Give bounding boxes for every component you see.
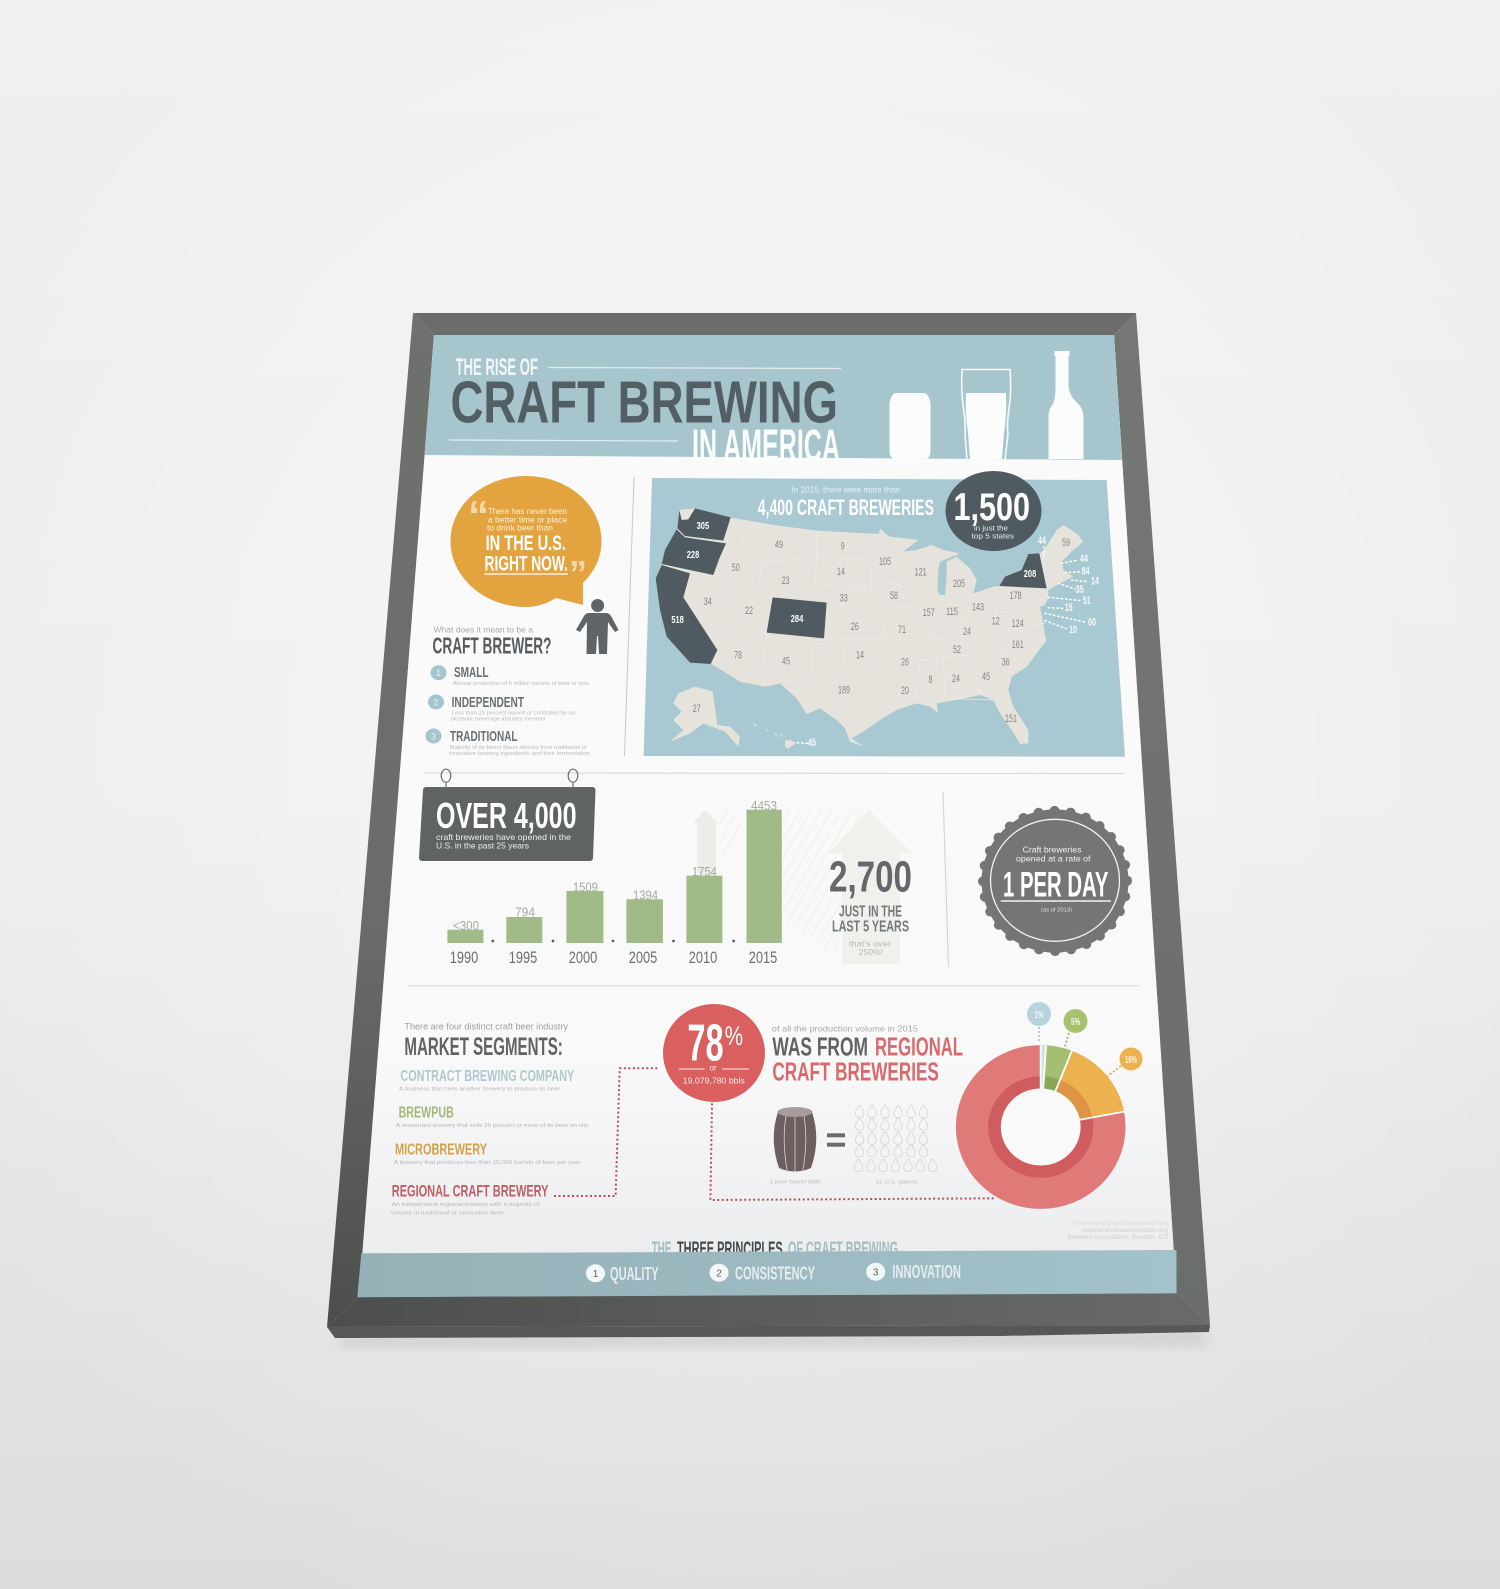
- year axis labels: 2015: [749, 948, 777, 967]
- heading: three principles: THE: [652, 1238, 671, 1260]
- year axis labels: 2010: [689, 948, 717, 967]
- callout: 1,500 in top 5 states: top 5 states: [972, 532, 1014, 541]
- hanging sign: over 4,000: U.S. in the past 25 years: [436, 841, 529, 851]
- callout: 78 percent: 78: [687, 1015, 724, 1073]
- map state numbers: 45: [982, 671, 990, 683]
- heading: market segments: MARKET SEGMENTS:: [404, 1033, 563, 1061]
- source credits: [1067, 1220, 1169, 1241]
- bar values: [453, 798, 777, 933]
- bar chart: breweries by year: [447, 798, 912, 967]
- map land and states: [656, 508, 1088, 749]
- principle 1: quality: QUALITY: [610, 1264, 659, 1284]
- map state numbers: 121: [915, 567, 927, 579]
- heading: was from regional craft breweries: WAS FROM: [772, 1032, 868, 1062]
- hawaii: [753, 723, 796, 749]
- alaska: [670, 687, 740, 747]
- map state numbers: 305: [697, 520, 709, 532]
- callout dotted leaders: [797, 547, 1088, 743]
- item: traditional: Majority of its beers flavor derives from traditional or: [450, 745, 587, 751]
- segment: contract brewing company: A business that hires another brewery to produce its beer: [399, 1087, 560, 1093]
- map heading: 4,400 CRAFT BREWERIES: [758, 495, 934, 520]
- hatched background: [718, 810, 868, 958]
- map state numbers: 24: [952, 673, 960, 685]
- segment: regional craft brewery: REGIONAL CRAFT BREWERY: [392, 1181, 549, 1200]
- item: independent: 2: [433, 697, 439, 707]
- icon: person: [576, 599, 618, 654]
- stat: 2,700 in last 5 years: 250%!: [859, 948, 883, 957]
- poster sheet: [359, 335, 1176, 1297]
- stat: 2,700 in last 5 years: [829, 853, 912, 957]
- heading: three principles: THREE PRINCIPLES: [677, 1238, 783, 1260]
- item: independent: alcoholic beverage industry member: [450, 716, 546, 722]
- bar values: 794: [515, 905, 535, 920]
- segment: brewpub: A restaurant-brewery that sells 25 percent or more of its beer on site: [396, 1123, 589, 1129]
- badge: 1 per day: Craft breweries: [1023, 844, 1082, 854]
- footer band: principles: [357, 1250, 1176, 1297]
- dark state: colorado: [767, 597, 827, 638]
- heading: was from regional craft breweries: REGIONAL: [875, 1032, 963, 1062]
- big growth arrow: [828, 810, 912, 964]
- map state numbers: 15: [1065, 602, 1073, 614]
- stat: 2,700 in last 5 years: LAST 5 YEARS: [832, 919, 909, 936]
- closing quote mark: ”: [569, 553, 587, 594]
- year axis labels: [450, 948, 777, 967]
- map state numbers: 20: [901, 685, 909, 697]
- quote text: a better time or place: [488, 516, 568, 524]
- callout: 78 percent: 19,079,780 bbls: [683, 1075, 745, 1085]
- map state numbers: 105: [879, 556, 891, 568]
- map state numbers: 14: [1091, 576, 1100, 588]
- map state numbers: 151: [1005, 713, 1017, 725]
- map state numbers: 36: [1002, 657, 1010, 669]
- bar values: 1394: [633, 888, 658, 903]
- principle 3: innovation: 3: [873, 1267, 879, 1278]
- map state numbers: 24: [963, 626, 971, 638]
- year axis labels: 1990: [450, 948, 478, 967]
- map state numbers: 71: [898, 624, 906, 636]
- map state numbers: 178: [1010, 590, 1022, 602]
- opening quote mark: “: [468, 492, 489, 539]
- hanging sign: over 4,000: OVER 4,000: [436, 795, 576, 836]
- bar values: 4453: [751, 798, 777, 813]
- panel: market segments: [391, 1021, 589, 1216]
- source credits: All data and graphics sourced from: [1072, 1220, 1168, 1227]
- map state numbers: 161: [1012, 639, 1024, 651]
- principle 3: innovation: INNOVATION: [892, 1262, 961, 1282]
- item: small: 1: [436, 668, 441, 678]
- map heading: In 2015, there were more than: [792, 486, 900, 495]
- map state numbers: 45: [782, 656, 790, 668]
- icon grid: 31 gallons: 31 U.S. gallons: [876, 1180, 918, 1186]
- badge: 1 per day: [982, 809, 1128, 953]
- title: the rise of: THE RISE OF: [456, 354, 538, 381]
- source credits: www.brewersassociation.org: [1081, 1227, 1169, 1234]
- bar values: 1509: [573, 879, 598, 894]
- stat: 2,700 in last 5 years: JUST IN THE: [839, 904, 902, 921]
- separator dots: [491, 940, 735, 942]
- year axis labels: 1995: [509, 948, 537, 967]
- segment: brewpub: BREWPUB: [399, 1105, 454, 1122]
- badge: 1 per day: (as of 2013): [1041, 908, 1072, 914]
- heading: craft brewer: CRAFT BREWER?: [432, 632, 552, 658]
- segment: contract brewing company: [399, 1068, 575, 1093]
- callout: 16 percent: 16%: [1125, 1055, 1137, 1066]
- map state numbers: 49: [775, 539, 783, 551]
- panel: craft brewer definition: What does it mean to be a: [434, 626, 534, 635]
- icon: beer barrel: 1 beer barrel (bbl): [770, 1180, 821, 1186]
- icon: can: [890, 393, 930, 458]
- map state numbers: 59: [1062, 537, 1070, 549]
- picture frame: [327, 313, 1210, 1338]
- map state numbers: 10: [1069, 624, 1077, 636]
- map state numbers: 143: [972, 602, 984, 614]
- year axis labels: 2005: [629, 948, 657, 967]
- item: small: Annual production of 6 million barrels of beer or less: [453, 681, 590, 687]
- map state numbers: 228: [687, 549, 699, 561]
- segment: regional craft brewery: An independent regional brewery with a majority of: [392, 1202, 540, 1208]
- principle 2: consistency: [710, 1264, 815, 1284]
- map state numbers: 27: [693, 703, 701, 715]
- item: independent: INDEPENDENT: [452, 694, 524, 711]
- map state numbers: 84: [1082, 566, 1090, 578]
- sign hooks: [441, 769, 578, 788]
- item: traditional: 3: [431, 731, 436, 741]
- map state numbers: 52: [953, 644, 961, 656]
- heading: was from regional craft breweries: of all the production volume in 2015: [772, 1023, 918, 1033]
- segment: microbrewery: A brewery that produces less than 15,000 barrels of beer per year: [394, 1160, 581, 1166]
- map state numbers: 44: [1038, 535, 1047, 547]
- map state numbers: 518: [671, 614, 684, 626]
- panel: market segments: There are four distinct craft beer industry: [404, 1021, 568, 1031]
- stat: 2,700 in last 5 years: 2,700: [829, 853, 912, 902]
- speech bubble quote: [450, 476, 602, 607]
- map state numbers: 35: [1076, 584, 1084, 596]
- principle 1: quality: 1: [593, 1269, 599, 1280]
- map state numbers: 157: [923, 607, 935, 619]
- map state numbers: 14: [837, 566, 845, 578]
- heading: three principles: OF CRAFT BREWING: [788, 1238, 898, 1260]
- callout: 5 percent: 5%: [1071, 1017, 1080, 1028]
- map state numbers: 44: [1080, 553, 1089, 565]
- map state numbers: 45: [808, 737, 816, 749]
- callout: 16 percent: [1108, 1048, 1142, 1076]
- hanging sign: over 4,000: [422, 769, 592, 858]
- principle 3: innovation: [866, 1262, 961, 1282]
- source credits: Brewers Association, Boulder, CO: [1067, 1234, 1168, 1241]
- segment: brewpub: [396, 1105, 589, 1129]
- map state numbers: 78: [734, 650, 742, 662]
- map state numbers: 205: [953, 578, 965, 590]
- map state numbers: 208: [1024, 568, 1036, 580]
- year axis labels: 2000: [569, 948, 597, 967]
- item: traditional: [426, 728, 590, 757]
- map state numbers: 58: [890, 590, 898, 602]
- icon grid: 31 gallons: [854, 1106, 937, 1186]
- callout: 1 percent: [1027, 1002, 1051, 1043]
- map state numbers: 284: [791, 613, 803, 625]
- map state numbers: 33: [840, 593, 848, 605]
- callout: 1,500 in top 5 states: 1,500: [954, 486, 1030, 529]
- icon: beer barrel: [770, 1107, 821, 1186]
- segment: 5 percent: [1041, 1045, 1072, 1127]
- callout: 1 percent: 1%: [1034, 1010, 1044, 1021]
- icon: equals sign: [827, 1133, 845, 1147]
- segment: contract brewing company: CONTRACT BREWING COMPANY: [400, 1068, 575, 1085]
- map state numbers: 14: [856, 650, 864, 662]
- map state numbers: 60: [1088, 617, 1096, 629]
- dark state: new york: [999, 553, 1047, 588]
- map state numbers: 26: [901, 657, 909, 669]
- item: independent: Less than 25 percent owned or controlled by an: [452, 711, 575, 717]
- panel: craft brewer definition: [426, 626, 590, 757]
- bars: [447, 810, 782, 943]
- map state numbers: 51: [1083, 595, 1091, 607]
- panel: us map: [644, 471, 1125, 757]
- segment: 1 percent: [1041, 1045, 1046, 1127]
- quote text: [484, 507, 568, 576]
- principle 2: consistency: 2: [716, 1268, 722, 1279]
- callout: 78 percent: [663, 1004, 765, 1102]
- segment: 16 percent: [1041, 1051, 1124, 1127]
- contiguous us land: [656, 508, 1083, 747]
- badge: 1 per day: 1 PER DAY: [1003, 866, 1108, 905]
- segment: regional craft brewery: volume in traditional or innovative beer: [391, 1210, 504, 1216]
- dark state: washington: [677, 508, 731, 541]
- heading: was from regional craft breweries: [772, 1023, 963, 1087]
- item: small: SMALL: [454, 664, 488, 681]
- heading: was from regional craft breweries: CRAFT BREWERIES: [772, 1057, 939, 1087]
- title: in america: IN AMERICA: [692, 420, 840, 471]
- map state numbers: 9: [841, 541, 845, 553]
- icon: pint glass: [962, 370, 1011, 460]
- segment: microbrewery: [394, 1142, 581, 1166]
- hanging sign: over 4,000: craft breweries have opened in the: [436, 832, 571, 842]
- bar values: <300: [453, 918, 479, 933]
- principle 1: quality: [586, 1264, 659, 1284]
- map state numbers: 124: [1012, 618, 1024, 630]
- quote text: to drink beer than: [487, 524, 553, 532]
- segment: microbrewery: MICROBREWERY: [395, 1142, 487, 1159]
- quote text: RIGHT NOW.: [484, 552, 568, 576]
- map state numbers: 50: [732, 562, 740, 574]
- quote text: IN THE U.S.: [486, 532, 566, 555]
- map state numbers: 22: [745, 605, 753, 617]
- map state numbers: 26: [851, 621, 859, 633]
- callout: 1,500 in top 5 states: [946, 471, 1042, 551]
- donut chart: production volume: [956, 1002, 1142, 1209]
- map state numbers: 34: [704, 596, 712, 608]
- callout: 1,500 in top 5 states: in just the: [974, 524, 1008, 533]
- segment: regional craft brewery: [391, 1181, 549, 1216]
- principle 2: consistency: CONSISTENCY: [735, 1264, 815, 1284]
- map state numbers: 12: [992, 616, 1000, 628]
- small growth arrow: [693, 810, 718, 876]
- map state numbers: 23: [782, 575, 790, 587]
- item: independent: [428, 694, 575, 722]
- item: traditional: innovative brewing ingredients and their fermentation: [449, 751, 590, 757]
- map heading: [758, 486, 934, 520]
- dark state: oregon: [662, 529, 726, 575]
- scalloped seal: [982, 809, 1128, 953]
- stat: 2,700 in last 5 years: that's over: [849, 939, 891, 948]
- map state numbers: 189: [838, 685, 850, 697]
- title: craft brewing: CRAFT BREWING: [450, 370, 838, 436]
- dotted connectors: [554, 1068, 996, 1200]
- bar values: 1754: [692, 864, 717, 879]
- callout: 5 percent: [1064, 1009, 1088, 1048]
- dark state: california: [656, 565, 717, 664]
- item: traditional: TRADITIONAL: [450, 728, 518, 745]
- map state numbers: 8: [928, 674, 932, 686]
- icon: bottle: [1048, 351, 1084, 459]
- header band: [424, 335, 1122, 471]
- callout: 78 percent: or: [709, 1064, 717, 1073]
- item: small: [430, 664, 590, 687]
- map state numbers: 115: [946, 606, 958, 618]
- quote text: There has never been: [488, 507, 567, 516]
- badge: 1 per day: opened at a rate of: [1016, 853, 1091, 863]
- callout: 78 percent: %: [725, 1021, 743, 1051]
- map state numbers: [671, 520, 1100, 749]
